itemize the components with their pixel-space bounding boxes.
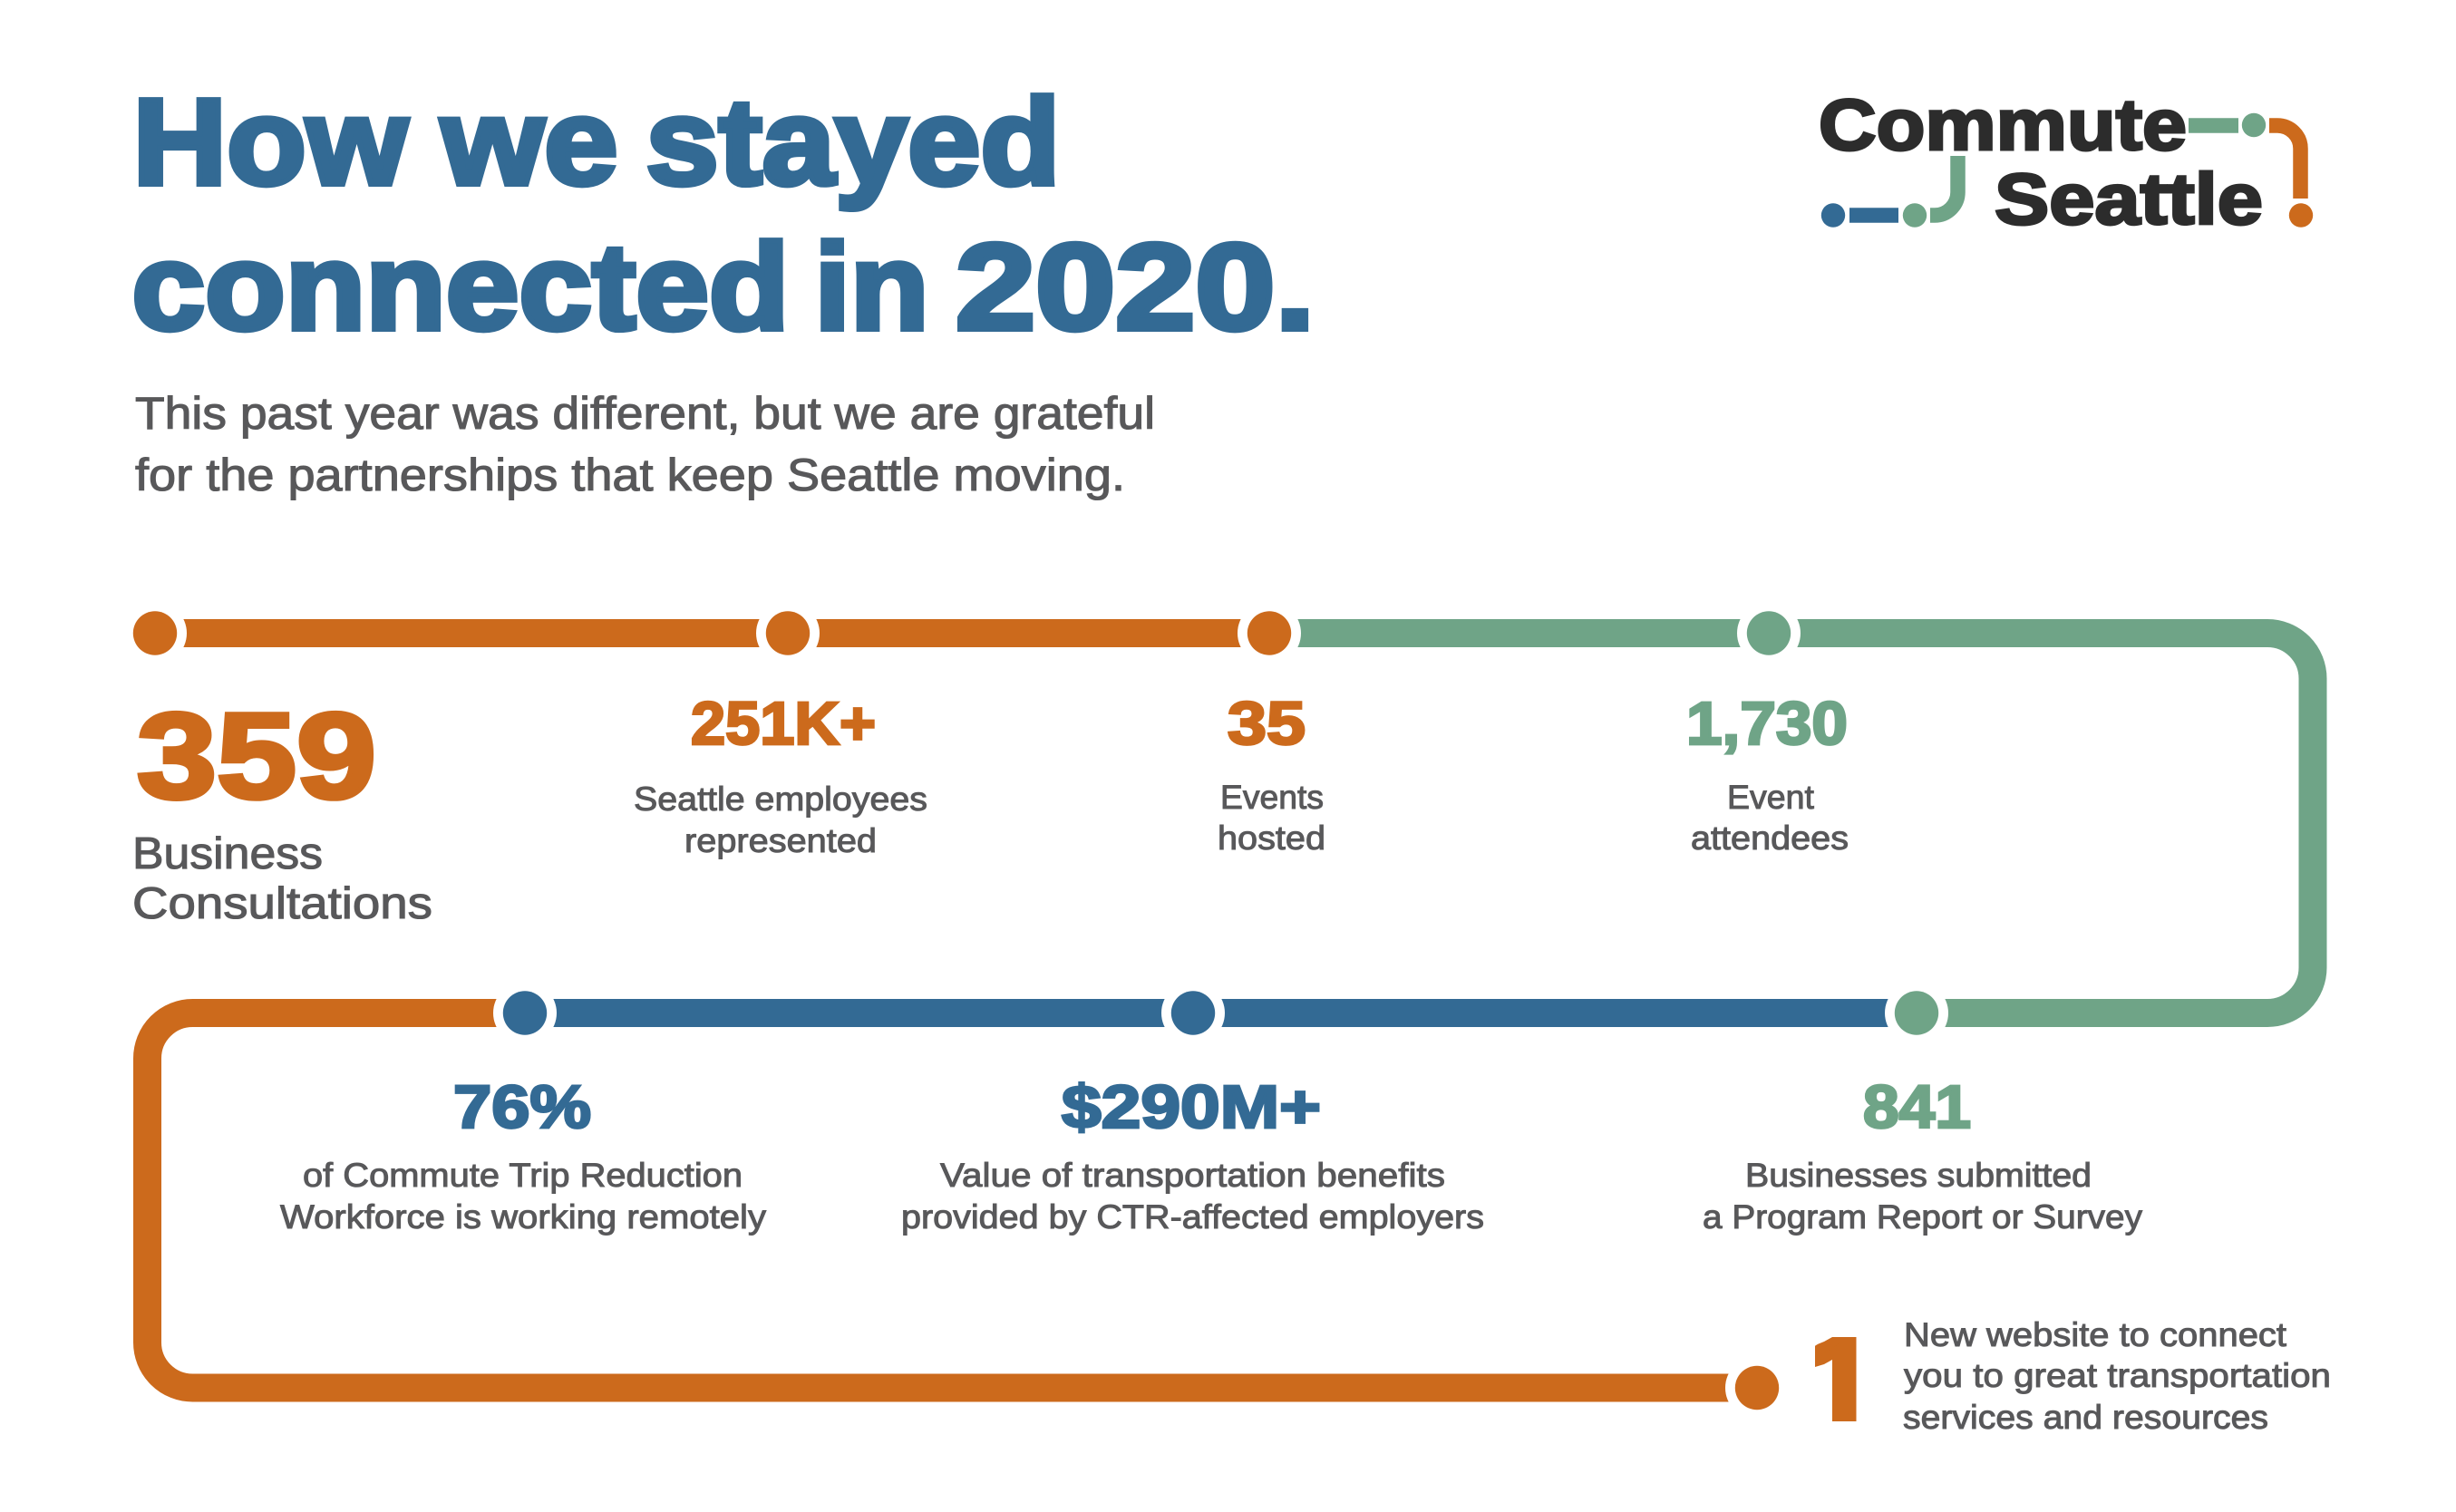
stat: 1,730 attendees: Event bbox=[1727, 779, 1815, 816]
title: connected bbox=[132, 218, 789, 355]
logo: Commute Seattle: Commute bbox=[1819, 84, 2187, 165]
stat: 1,730 attendees: 1,730 bbox=[1686, 690, 1848, 758]
stat: 841 businesses: a Program Report or Survey bbox=[1703, 1198, 2143, 1236]
stat: $290M+ benefits: $290M+ bbox=[1062, 1073, 1321, 1141]
stat: 251K+ employees bbox=[634, 690, 927, 859]
stop: start bbox=[123, 602, 187, 665]
stat: 76% remote: 76% bbox=[453, 1073, 591, 1141]
stat: 841 businesses: 841 bbox=[1863, 1073, 1971, 1141]
stat: 1 new website bbox=[1815, 1322, 2329, 1430]
stop: employees bbox=[756, 602, 820, 665]
stop: remote workforce bbox=[493, 981, 557, 1044]
stat: 35 events: Events bbox=[1220, 779, 1324, 816]
stop: website bbox=[1725, 1356, 1789, 1420]
stat: $290M+ benefits: provided by CTR-affected employers bbox=[901, 1198, 1484, 1236]
stat: 1 new website: services and resources bbox=[1903, 1399, 2268, 1436]
stat: 251K+ employees: Seattle employees bbox=[634, 780, 927, 818]
subtitle: for the partnerships that keep Seattle moving. bbox=[135, 450, 1125, 500]
stat: 76% remote bbox=[280, 1073, 767, 1236]
stat: 359 business consultations: Business bbox=[132, 829, 323, 878]
title: 2020. bbox=[956, 218, 1315, 355]
stat: 35 events: 35 bbox=[1228, 690, 1306, 758]
title bbox=[132, 73, 1315, 355]
title: in bbox=[814, 218, 928, 355]
stat: $290M+ benefits: Value of transportation benefits bbox=[940, 1157, 1445, 1194]
stat: 76% remote: Workforce is working remotely bbox=[280, 1198, 767, 1236]
stat: 35 events: hosted bbox=[1218, 819, 1325, 857]
stat: 251K+ employees: represented bbox=[684, 822, 877, 859]
stat: 1,730 attendees bbox=[1686, 690, 1849, 857]
logo: Commute Seattle: Seattle bbox=[1995, 159, 2263, 239]
stat: $290M+ benefits bbox=[901, 1073, 1484, 1236]
stat: 841 businesses bbox=[1703, 1073, 2143, 1236]
logo: Commute Seattle bbox=[1819, 84, 2313, 239]
subtitle bbox=[135, 388, 1155, 500]
stat: 359 business consultations: 359 bbox=[137, 689, 376, 824]
stat: 1 new website: you to great transportation bbox=[1904, 1357, 2331, 1394]
stat: 841 businesses: Businesses submitted bbox=[1745, 1157, 2092, 1194]
infographic canvas bbox=[132, 92, 2329, 1430]
stat: 35 events bbox=[1218, 690, 1325, 857]
stop: businesses bbox=[1885, 981, 1948, 1044]
stat: 1,730 attendees: attendees bbox=[1691, 819, 1849, 857]
stop: benefits bbox=[1161, 981, 1225, 1044]
stat: 1 new website: 1 bbox=[1810, 1312, 1876, 1445]
stat: 76% remote: of Commute Trip Reduction bbox=[303, 1157, 743, 1194]
stop: attendees bbox=[1737, 602, 1801, 665]
stop: events bbox=[1238, 602, 1301, 665]
title: How bbox=[132, 73, 409, 210]
stat: 1 new website: New website to connect bbox=[1904, 1316, 2287, 1353]
stat: 251K+ employees: 251K+ bbox=[691, 690, 876, 758]
stat: 359 business consultations bbox=[132, 689, 432, 928]
title: stayed bbox=[646, 73, 1061, 210]
stat: 359 business consultations: Consultations bbox=[132, 879, 432, 928]
subtitle: This past year was different, but we are grateful bbox=[135, 388, 1155, 439]
title: we bbox=[440, 73, 618, 210]
route line with stops bbox=[123, 602, 2313, 1420]
